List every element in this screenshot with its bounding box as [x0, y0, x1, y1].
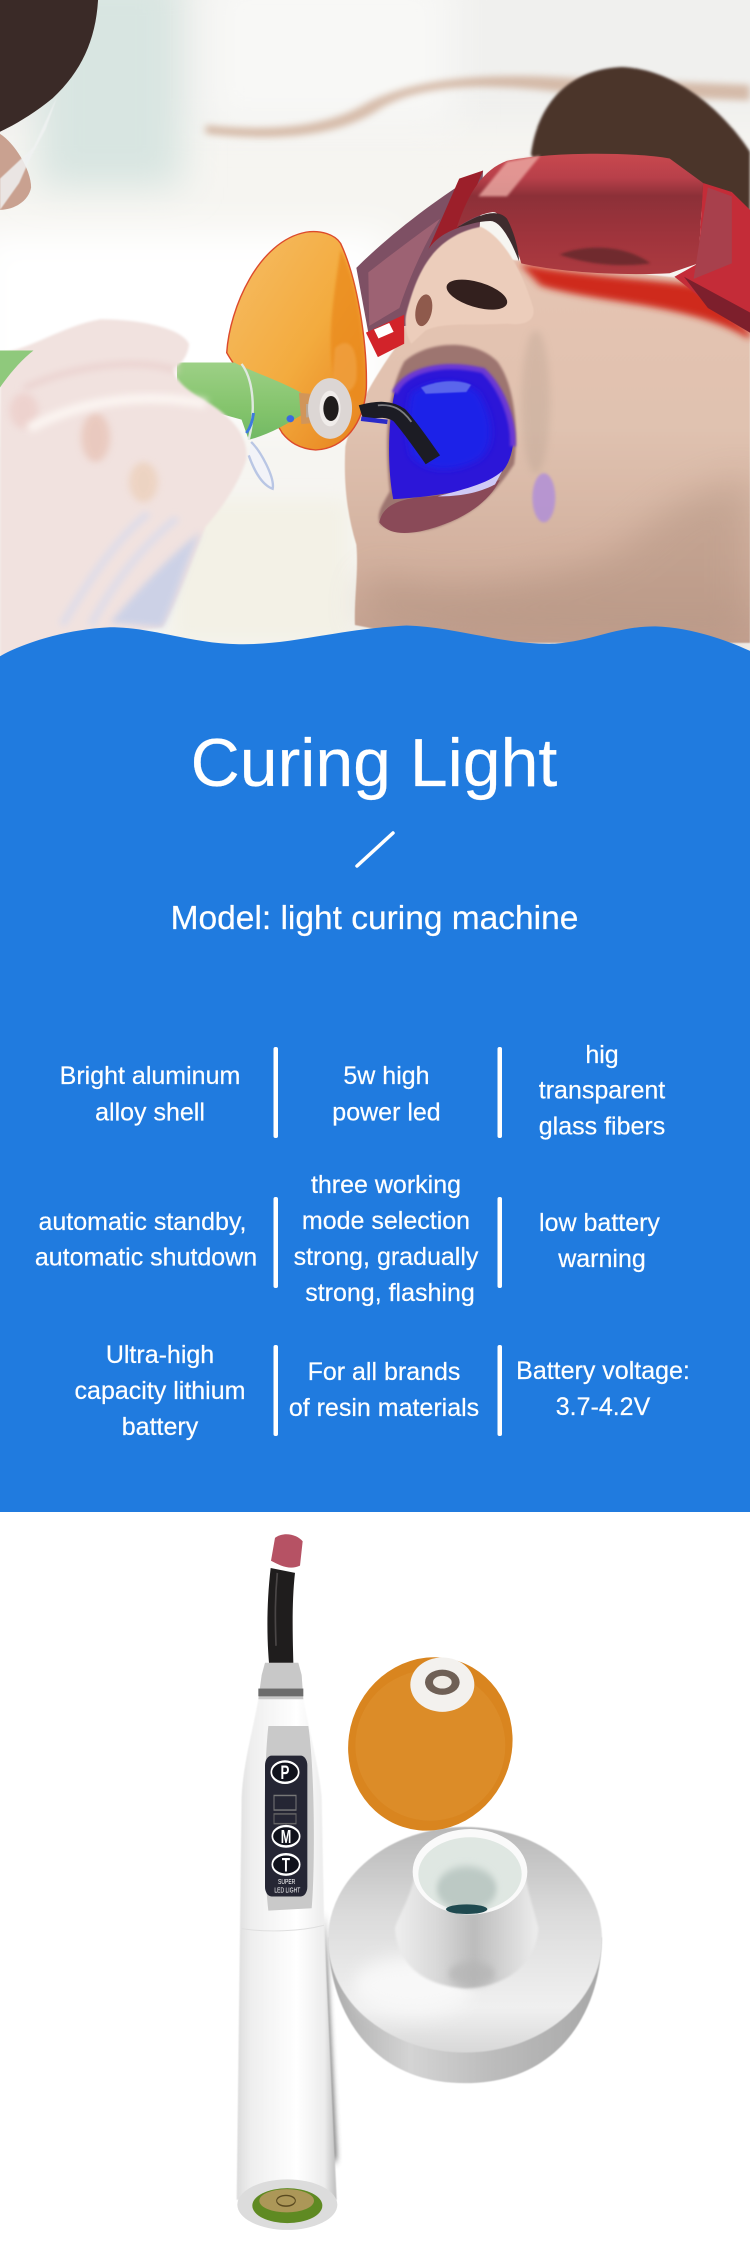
decorative slash icon: [357, 833, 393, 866]
control panel with buttons: M: [281, 1828, 291, 1848]
shadow beside handpiece: [322, 1913, 337, 2161]
green handpiece: [177, 362, 326, 440]
green handle behind fingers: [0, 350, 33, 388]
feature: standby and shutdown: automatic shutdown: [35, 1244, 257, 1272]
subtitle: model: Model: light curing machine: [171, 900, 578, 937]
black fiber tip: [361, 405, 433, 460]
feature: lithium battery: Ultra-high: [106, 1341, 214, 1369]
charging base: [328, 1827, 602, 2083]
title: Curing Light: [191, 725, 557, 801]
control panel with buttons: SUPER: [278, 1878, 296, 1886]
feature: lithium battery: battery: [122, 1413, 199, 1441]
patient hair: [529, 65, 750, 210]
hero photo: patient receiving curing light: [0, 0, 750, 700]
feature: working modes: strong, gradually: [294, 1243, 479, 1271]
row 3 divider left: [274, 1345, 278, 1436]
product photo: curing light, shield and charging base: [0, 1512, 750, 2262]
stubble shading: [364, 330, 750, 643]
glove shading: [10, 364, 206, 627]
feature: standby and shutdown: automatic standby,: [39, 1208, 246, 1236]
gloved hand: [0, 319, 247, 658]
dentist hair and face: [0, 0, 98, 210]
feature: glass fibers: hig: [585, 1041, 619, 1069]
feature: battery voltage: Battery voltage:: [516, 1357, 690, 1385]
feature: working modes: mode selection: [302, 1207, 470, 1235]
row 1 divider left: [274, 1047, 278, 1138]
panel: blue specification section: [0, 690, 750, 1512]
handpiece body: [237, 1534, 337, 2230]
nose: [405, 227, 534, 344]
patient face: [345, 250, 750, 643]
nostrils: [415, 280, 508, 326]
open mouth with lips: [379, 345, 516, 533]
feature: low battery warning: low battery: [539, 1209, 660, 1237]
control panel with buttons: P: [281, 1761, 289, 1784]
control panel with buttons: LED LIGHT: [274, 1887, 300, 1895]
feature: aluminum shell: Bright aluminum: [60, 1062, 240, 1090]
orange filter disc: [344, 1649, 517, 1839]
loop below handpiece: [249, 442, 273, 489]
feature: working modes: strong, flashing: [305, 1279, 475, 1307]
goggles: [356, 154, 750, 357]
feature: glass fibers: glass fibers: [539, 1112, 665, 1140]
row 3 divider right: [498, 1345, 502, 1436]
feature: resin materials: of resin materials: [289, 1394, 479, 1422]
feature: lithium battery: capacity lithium: [75, 1377, 245, 1405]
feature: low battery warning: warning: [557, 1245, 646, 1273]
control panel with buttons: [265, 1726, 314, 1911]
purple light spot on chin: [532, 473, 555, 522]
feature: high power led: power led: [332, 1098, 441, 1126]
collar with star opening: [308, 378, 352, 439]
blurred clinic background: [0, 0, 750, 700]
feature: battery voltage: 3.7-4.2V: [556, 1393, 651, 1421]
row 2 divider right: [498, 1197, 502, 1288]
orange shield: [227, 232, 366, 450]
wave edge of blue panel: [0, 626, 750, 690]
feature: aluminum shell: alloy shell: [95, 1098, 205, 1126]
control panel with buttons: T: [282, 1854, 290, 1876]
feature: glass fibers: transparent: [539, 1076, 665, 1104]
led digits: [274, 1795, 296, 1824]
row 1 divider right: [498, 1047, 502, 1138]
row 2 divider left: [274, 1197, 278, 1288]
feature: working modes: three working: [311, 1171, 461, 1199]
feature: resin materials: For all brands: [308, 1358, 460, 1386]
feature: high power led: 5w high: [343, 1062, 430, 1090]
